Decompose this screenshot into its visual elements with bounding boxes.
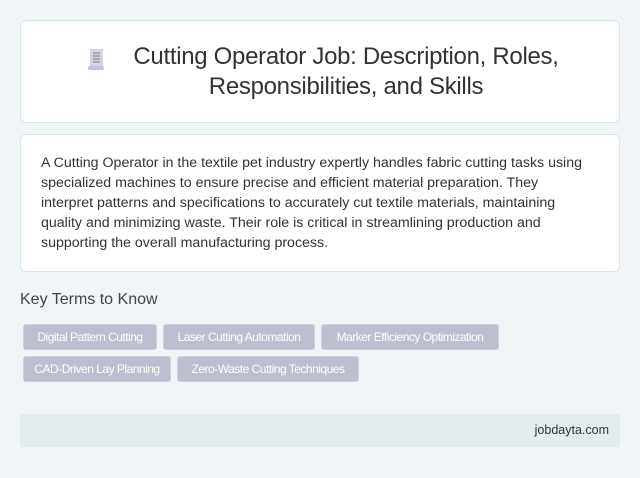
title: Cutting Operator Job: Description, Roles, Responsibilities, and Skills — [133, 43, 559, 100]
icon: document — [88, 49, 104, 70]
tag 2 — [163, 324, 315, 350]
tag 4: CAD-Driven Lay Planning — [34, 362, 160, 376]
tag 3: Marker Efficiency Optimization — [337, 330, 483, 344]
footer — [20, 414, 620, 447]
description card — [20, 134, 620, 272]
tag 1 — [23, 324, 157, 350]
tag 5: Zero-Waste Cutting Techniques — [192, 362, 344, 376]
header card — [20, 20, 620, 123]
footer text: jobdayta.com — [535, 423, 609, 437]
heading: key terms: Key Terms to Know — [20, 291, 158, 308]
tag 1: Digital Pattern Cutting — [37, 330, 143, 344]
tag 5 — [177, 356, 359, 382]
tag 3 — [321, 324, 499, 350]
description text: A Cutting Operator in the textile pet industry expertly handles fabric cutting tasks using specialized machines to ensure precise and efficient material preparation. They interpret patterns and specifications to accurately cut textile materials, maintaining quality and minimizing waste. Their role is critical in streamlining production and supporting the overall manufacturing process. — [41, 155, 582, 251]
tag 4 — [23, 356, 171, 382]
tag 2: Laser Cutting Automation — [178, 330, 300, 344]
